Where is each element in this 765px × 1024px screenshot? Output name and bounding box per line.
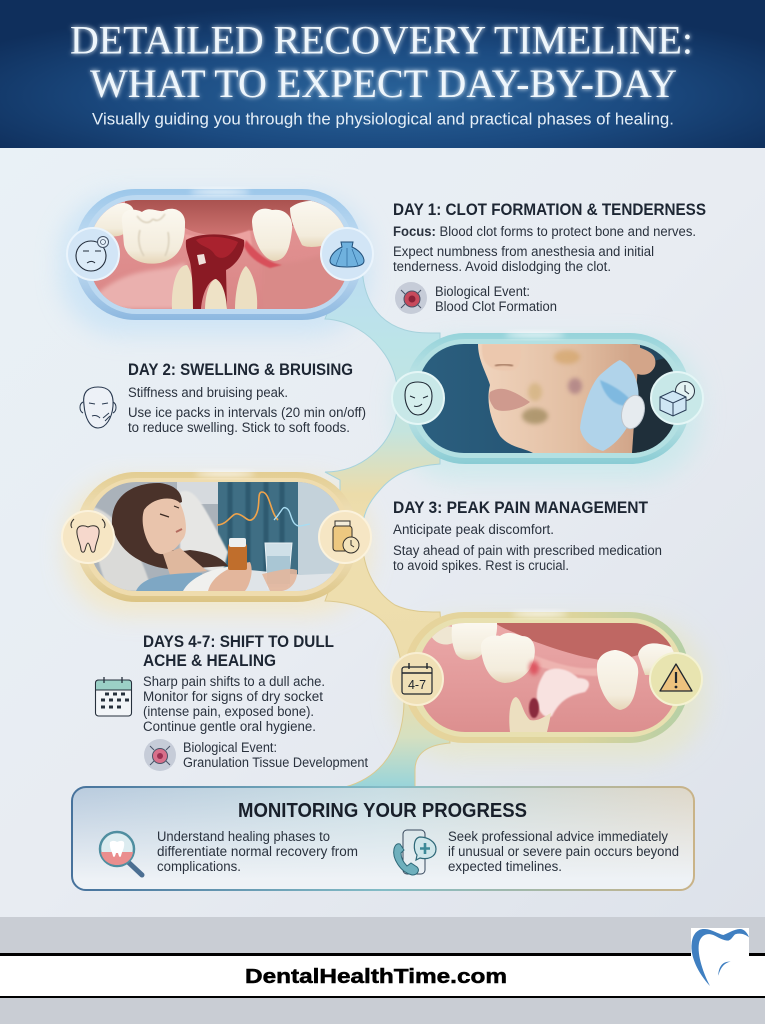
face xyxy=(143,499,186,554)
connector: days 3, 4 and monitoring box xyxy=(325,535,450,787)
heading: DAY 1: CLOT FORMATION & TENDERNESS xyxy=(393,201,706,219)
icon: calendar xyxy=(96,677,132,716)
icon: warning triangle xyxy=(650,653,702,705)
text block: days 4-7: Monitor for signs of dry socket xyxy=(143,689,323,704)
bruises xyxy=(522,408,548,424)
icon: sleepy face with spiral xyxy=(67,228,119,280)
pill frame xyxy=(405,333,690,464)
lips xyxy=(489,389,530,411)
bone left xyxy=(172,265,195,309)
icon: phone with medical chat xyxy=(394,830,436,875)
pill frame xyxy=(76,472,357,602)
icon: bruised face outline xyxy=(80,387,116,428)
pill frame xyxy=(75,189,362,320)
title line 1: DETAILED RECOVERY TIMELINE: xyxy=(70,18,693,62)
page background xyxy=(0,148,765,917)
photo: tooth socket with clot xyxy=(90,200,348,309)
highlight xyxy=(512,612,568,616)
subtitle: Visually guiding you through the physiological and practical phases of healing. xyxy=(92,110,674,128)
back molar xyxy=(452,623,497,660)
footer website label: DentalHealthTime.com xyxy=(245,966,507,988)
text block: day 2: to reduce swelling. Stick to soft foods. xyxy=(128,420,350,435)
icon: throbbing tooth xyxy=(62,511,114,563)
panel: days 4-7 pill xyxy=(391,612,702,743)
text: left: Understand healing phases to xyxy=(157,829,330,844)
text block: day 1: tenderness. Avoid dislodging the clot. xyxy=(393,259,611,274)
hair xyxy=(112,483,228,570)
socket xyxy=(529,698,539,718)
panel: day 3 pill xyxy=(62,472,371,602)
icon: pill bottle and clock xyxy=(319,511,371,563)
far left tooth xyxy=(432,626,452,644)
photo: bruised cheek with ice pack xyxy=(418,344,677,453)
left molar xyxy=(122,209,185,264)
text block: days 4-7: (intense pain, exposed bone). xyxy=(143,704,314,719)
exposed bone xyxy=(509,697,551,732)
description: Use ice packs in intervals (20 min on/off) xyxy=(128,405,366,420)
heading: MONITORING YOUR PROGRESS xyxy=(238,800,527,822)
background glows xyxy=(60,195,705,760)
header banner xyxy=(0,0,765,148)
panel: monitoring your progress: differentiate normal recovery from xyxy=(157,844,358,859)
text: right: Seek professional advice immediately xyxy=(448,829,668,844)
text block: day 1: Blood Clot Formation xyxy=(435,299,557,314)
text block: days 4-7: ACHE & HEALING xyxy=(143,652,276,670)
pill frame xyxy=(404,612,689,743)
text block: day 1 xyxy=(393,201,706,314)
heading: DAY 2: SWELLING & BRUISING xyxy=(128,361,353,379)
biological event: Biological Event: xyxy=(435,284,530,299)
blue gown xyxy=(136,573,203,591)
text block: day 3: to avoid spikes. Rest is crucial. xyxy=(393,558,569,573)
ice pack xyxy=(580,360,639,451)
pain curve xyxy=(217,492,278,525)
nose xyxy=(482,344,503,370)
description: Sharp pain shifts to a dull ache. xyxy=(143,674,325,689)
title line 2: WHAT TO EXPECT DAY-BY-DAY xyxy=(90,61,677,106)
highlight xyxy=(505,333,565,337)
hand holding glass xyxy=(262,569,297,591)
icon: magnifier with tooth xyxy=(100,832,142,875)
healing tissue xyxy=(537,669,589,717)
right tooth xyxy=(597,650,638,710)
glass xyxy=(265,543,292,588)
calendar label: 4-7 xyxy=(408,678,426,692)
footer band xyxy=(0,917,765,1024)
description: Stay ahead of pain with prescribed medication xyxy=(393,543,662,558)
description: Expect numbness from anesthesia and initial xyxy=(393,244,654,259)
icon: swollen face xyxy=(392,372,444,424)
panel: day 1 pill xyxy=(67,189,373,320)
text block: days 4-7 xyxy=(96,633,368,771)
highlight xyxy=(190,190,250,194)
biological event: Biological Event: xyxy=(183,740,277,755)
ice pack cap xyxy=(621,394,645,430)
bone right xyxy=(235,266,257,309)
heading: DAY 3: PEAK PAIN MANAGEMENT xyxy=(393,499,648,517)
hand holding bottle xyxy=(208,562,252,591)
heading: DAYS 4-7: SHIFT TO DULL xyxy=(143,633,334,651)
bottle xyxy=(228,544,247,570)
bone center xyxy=(205,279,227,309)
red inflamed spot xyxy=(529,661,539,675)
clot xyxy=(186,234,244,309)
panel: monitoring your progress: expected timelines. xyxy=(448,859,562,874)
lead: Anticipate peak discomfort. xyxy=(393,522,554,537)
right tooth xyxy=(252,209,292,261)
back pillow xyxy=(180,491,228,575)
panel: day 2 pill xyxy=(392,333,703,464)
highlight xyxy=(195,472,255,476)
icon: granulation tissue xyxy=(144,739,176,771)
panel: monitoring your progress: complications. xyxy=(157,859,241,874)
icon: ice cube and clock xyxy=(651,372,703,424)
panel: monitoring your progress xyxy=(72,787,694,890)
far left tooth xyxy=(92,203,134,237)
text block: day 2 xyxy=(80,361,366,435)
white blanket xyxy=(183,566,228,591)
panel: monitoring your progress: if unusual or severe pain occurs beyond xyxy=(448,844,679,859)
lead: Stiffness and bruising peak. xyxy=(128,385,288,400)
photo: healing socket xyxy=(419,623,680,732)
neck xyxy=(163,548,207,575)
icon: ice pack xyxy=(321,228,373,280)
logo tooth xyxy=(691,928,749,988)
text block: day 3 xyxy=(393,499,662,573)
focus: Focus: Blood clot forms to protect bone and nerves. xyxy=(393,224,696,239)
text block: days 4-7: Granulation Tissue Development xyxy=(183,755,368,770)
front molar xyxy=(481,633,535,683)
far right tooth xyxy=(290,201,347,247)
pillow xyxy=(93,507,152,591)
photo: woman resting with medication xyxy=(90,482,343,591)
icon: blood clot xyxy=(395,282,427,314)
icon: calendar 4-7 xyxy=(391,653,443,705)
far right tooth xyxy=(638,643,674,675)
connector: days 1, 2 and 3 xyxy=(325,262,440,535)
gum bleed xyxy=(244,240,282,268)
text block: days 4-7: Continue gentle oral hygiene. xyxy=(143,719,316,734)
